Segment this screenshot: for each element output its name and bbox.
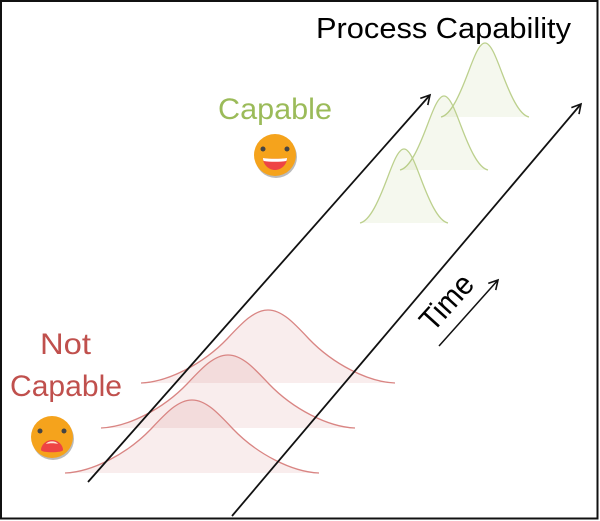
- label: not capable: Not: [40, 328, 92, 361]
- label: not capable: Capable: [10, 370, 122, 403]
- green capable distributions: [360, 43, 529, 223]
- icon: happy face: [254, 134, 297, 178]
- right time boundary arrow: [232, 104, 581, 516]
- label: capable: Capable: [218, 93, 332, 126]
- label: not capable: [10, 328, 122, 403]
- icon: scared face: [31, 416, 74, 460]
- time label: Time: [412, 267, 481, 338]
- red not capable distributions: [65, 310, 395, 473]
- left time boundary arrow: [88, 95, 430, 482]
- time arrow: [439, 280, 498, 346]
- title: Process Capability: [316, 13, 572, 45]
